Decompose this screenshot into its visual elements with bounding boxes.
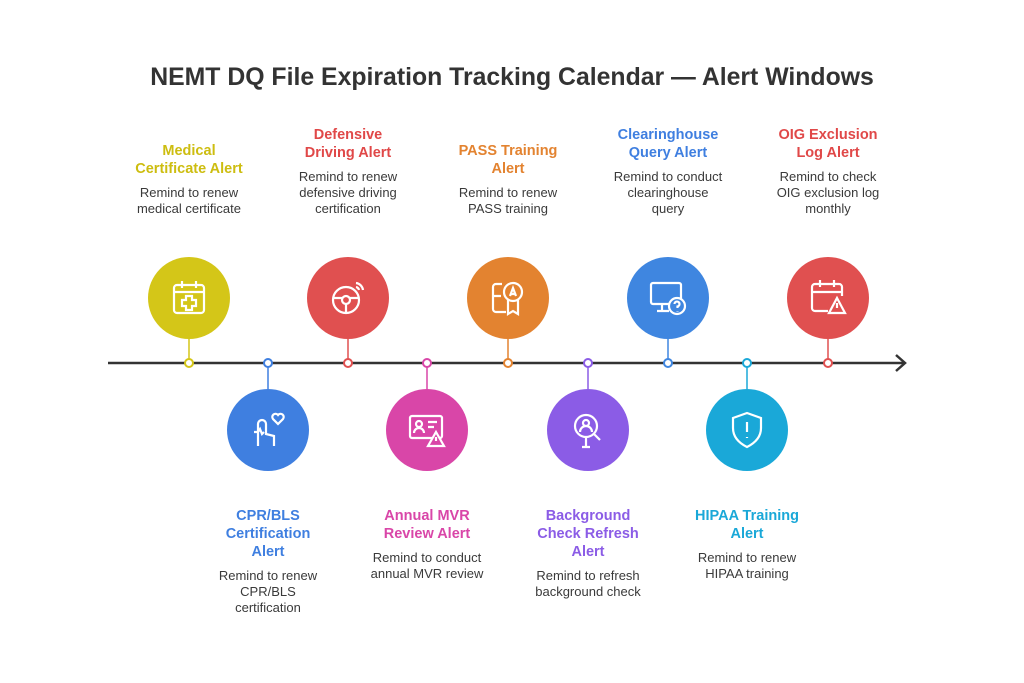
- text: OIG exclusion: Log Alert: [796, 145, 860, 161]
- text: annual MVR: annual MVR review: [371, 566, 483, 581]
- text: clearinghouse: Query Alert: [629, 145, 707, 161]
- text: medical certificate: Remind to renew: [140, 185, 238, 200]
- icon: MVR card warning: [386, 389, 468, 471]
- text: PASS training: PASS training: [468, 201, 548, 216]
- text: annual MVR: [371, 508, 484, 581]
- text: defensive driving: Remind to renew: [299, 169, 397, 184]
- text: medical certificate: medical certificate: [137, 201, 241, 216]
- text: OIG exclusion: Remind to check: [780, 169, 876, 184]
- icon: background check: [547, 389, 629, 471]
- text: CPR/BLS: Remind to renew: [219, 568, 317, 583]
- text: clearinghouse: Remind to conduct: [614, 169, 722, 184]
- text: defensive driving: certification: [315, 201, 381, 216]
- text: background check: Background: [546, 508, 630, 524]
- text: clearinghouse: query: [652, 201, 684, 216]
- text: medical certificate: Certificate Alert: [135, 161, 243, 177]
- text: background check: Remind to refresh: [536, 568, 640, 583]
- text: clearinghouse: [614, 127, 722, 216]
- text: clearinghouse: clearinghouse: [628, 185, 708, 200]
- text: OIG exclusion: OIG exclusion log: [777, 185, 879, 200]
- text: background check: Alert: [571, 544, 605, 560]
- icon: shield: [706, 389, 788, 471]
- text: PASS training: Alert: [491, 161, 525, 177]
- text: medical certificate: [135, 143, 243, 216]
- text: annual MVR: Review Alert: [384, 526, 470, 542]
- icon: PASS badge: [467, 257, 549, 339]
- title: NEMT DQ File Expiration Tracking Calendar — Alert Windows: [150, 64, 874, 91]
- icon: steering wheel: [307, 257, 389, 339]
- icon: medical calendar: [148, 257, 230, 339]
- text: HIPAA: Remind to renew: [698, 550, 796, 565]
- text: annual MVR: Remind to conduct: [373, 550, 481, 565]
- icon: calendar warning: [787, 257, 869, 339]
- text: defensive driving: defensive driving: [299, 185, 397, 200]
- text: background check: background check: [535, 584, 641, 599]
- text: CPR/BLS: certification: [235, 600, 301, 615]
- text: CPR/BLS: Alert: [251, 544, 285, 560]
- text: OIG exclusion: monthly: [805, 201, 851, 216]
- text: annual MVR: Annual MVR: [384, 508, 470, 524]
- text: background check: Check Refresh: [537, 526, 639, 542]
- icon: monitor question: [627, 257, 709, 339]
- text: PASS training: Remind to renew: [459, 185, 557, 200]
- text: HIPAA: [695, 508, 799, 581]
- text: CPR/BLS: CPR/BLS: [236, 508, 300, 524]
- text: OIG exclusion: OIG Exclusion: [778, 127, 878, 143]
- text: defensive driving: Driving Alert: [305, 145, 391, 161]
- text: medical certificate: Medical: [162, 143, 216, 159]
- text: defensive driving: Defensive: [314, 127, 382, 143]
- text: background check: [535, 508, 641, 599]
- text: CPR/BLS: Certification: [226, 526, 310, 542]
- text: clearinghouse: Clearinghouse: [618, 127, 718, 143]
- text: PASS training: [459, 143, 558, 216]
- text: CPR/BLS: [219, 508, 318, 615]
- text: HIPAA: Alert: [730, 526, 764, 542]
- text: PASS training: PASS Training: [459, 143, 557, 159]
- text: OIG exclusion: [777, 127, 879, 216]
- icon: CPR heart: [227, 389, 309, 471]
- text: CPR/BLS: CPR/BLS: [240, 584, 296, 599]
- text: HIPAA: HIPAA training: [705, 566, 789, 581]
- text: defensive driving: [299, 127, 398, 216]
- text: HIPAA: HIPAA Training: [695, 508, 799, 524]
